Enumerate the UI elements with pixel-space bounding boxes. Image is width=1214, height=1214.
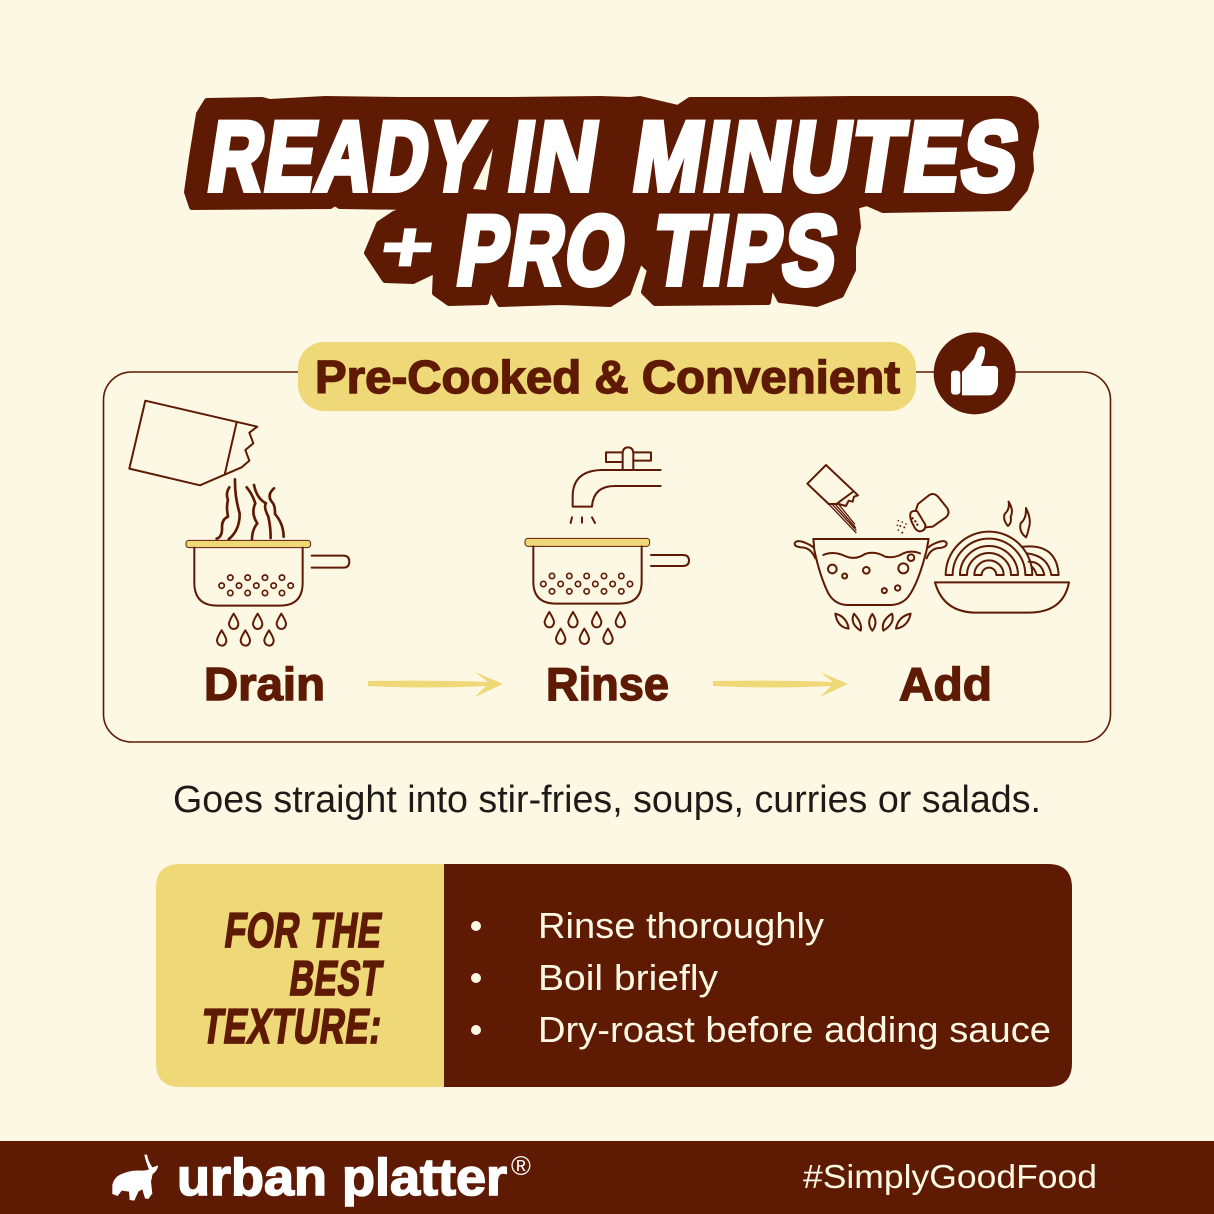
bullet list: Rinse thoroughly xyxy=(538,905,824,946)
title: MINUTES xyxy=(627,102,1028,211)
step label: rinse: Rinse xyxy=(546,658,669,710)
panel: steps xyxy=(104,332,1110,742)
label: for the best texture: TEXTURE: xyxy=(198,999,386,1054)
tips background xyxy=(444,864,1072,1087)
icon: rinse xyxy=(525,447,689,644)
title: TIPS xyxy=(647,196,847,305)
heading pill: pre-cooked and convenient: Pre-Cooked & Convenient xyxy=(315,351,900,403)
bullet list: Dry-roast before adding sauce xyxy=(538,1009,1051,1050)
title: PRO xyxy=(451,196,635,305)
description text: Goes straight into stir-fries, soups, curries or salads. xyxy=(173,779,1041,821)
registered mark: ® xyxy=(511,1151,531,1181)
bullet list xyxy=(471,905,1051,1050)
brand name: urban platter xyxy=(177,1149,507,1207)
arrow: rinse to add xyxy=(713,672,848,697)
step label: add: Add xyxy=(899,658,992,710)
title: + xyxy=(376,207,440,287)
footer band xyxy=(0,1141,1214,1214)
arrow: drain to rinse xyxy=(368,672,503,697)
icon: thumbs up xyxy=(934,332,1016,414)
label: for the best texture: BEST xyxy=(286,951,386,1006)
panel: best texture tips xyxy=(156,864,1072,1087)
panel outline xyxy=(104,372,1110,742)
hashtag: #SimplyGoodFood xyxy=(803,1158,1097,1195)
icon: drain xyxy=(129,401,349,646)
title: IN xyxy=(502,102,608,211)
heading pill: pre-cooked and convenient xyxy=(298,342,916,411)
label: for the best texture: FOR THE xyxy=(221,903,386,958)
icon: add to pot and serve xyxy=(795,465,1069,631)
step label: drain: Drain xyxy=(204,658,325,710)
bullet list: Boil briefly xyxy=(538,957,718,998)
label: for the best texture xyxy=(156,864,444,1087)
title: READY xyxy=(202,102,491,211)
title outline blob xyxy=(187,99,1036,304)
icon: elephant logo xyxy=(112,1155,158,1201)
title xyxy=(187,99,1036,305)
